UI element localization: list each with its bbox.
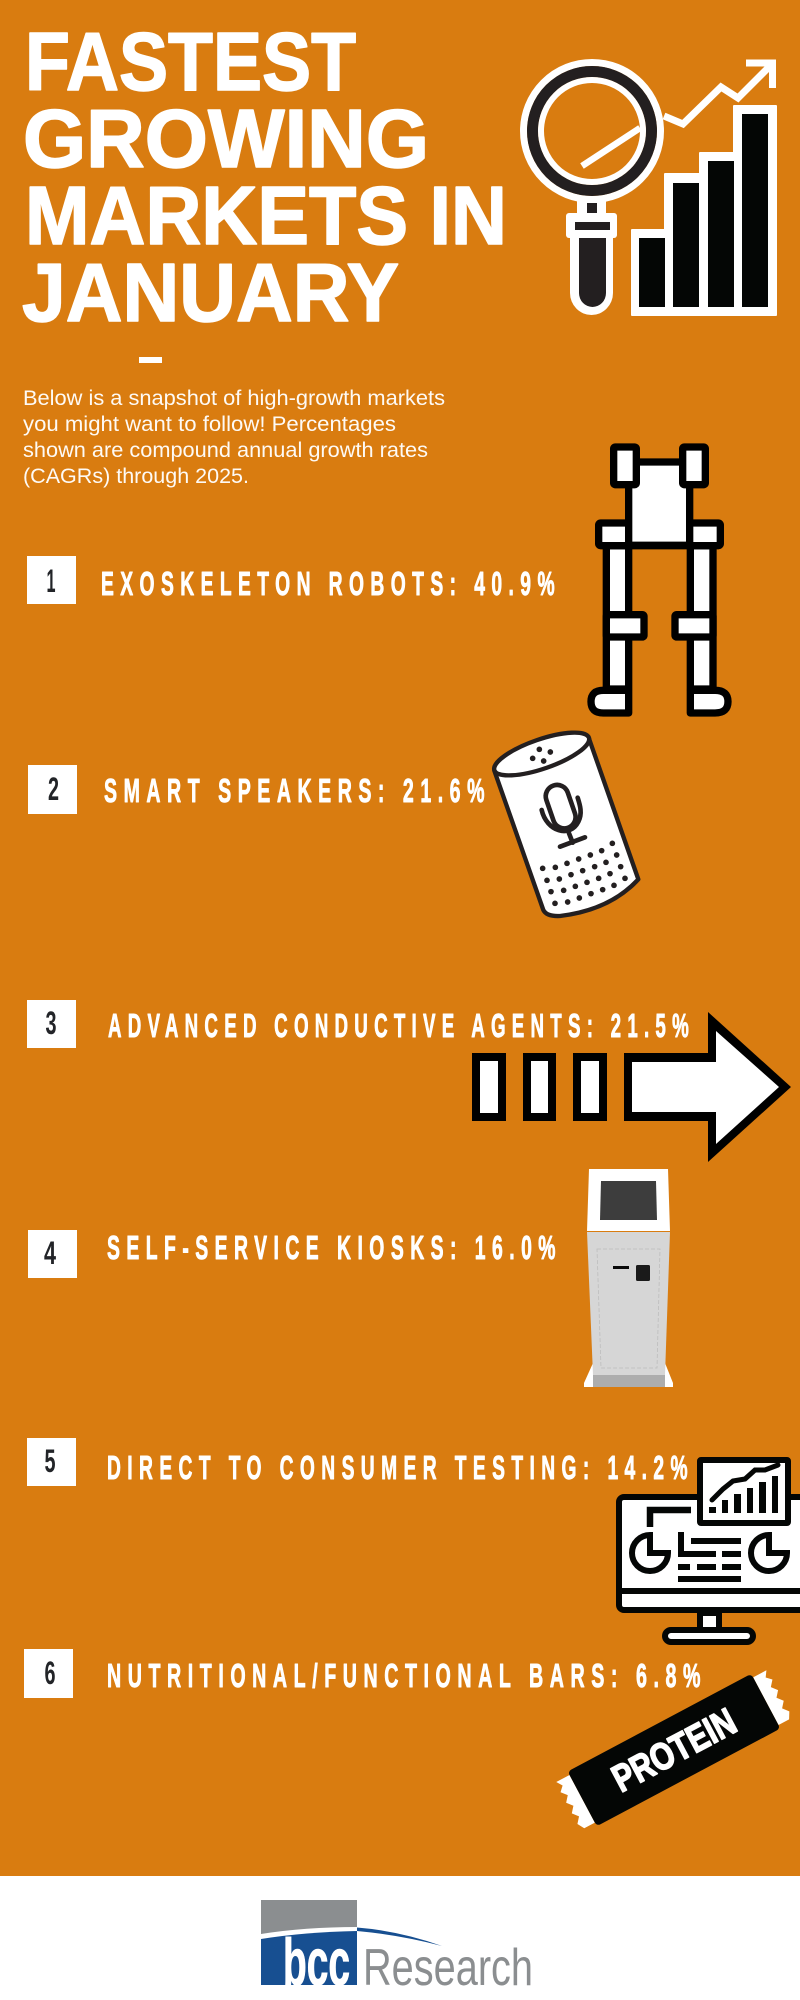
intro text: Below is a snapshot of high-growth markets bbox=[23, 387, 445, 410]
title: FASTEST bbox=[25, 15, 356, 108]
item 2 number bbox=[28, 765, 77, 814]
intro text: (CAGRs) through 2025. bbox=[23, 465, 249, 488]
intro text bbox=[23, 387, 445, 488]
icon: dashboard monitor bbox=[616, 1460, 800, 1642]
footer band bbox=[0, 1876, 800, 2000]
growth arrow bbox=[664, 63, 772, 124]
item 5 number: 5 bbox=[44, 1443, 56, 1479]
icon: protein bar: PROTEIN bbox=[605, 1701, 743, 1801]
item 2 number: 2 bbox=[48, 771, 59, 807]
icon: self-service kiosk bbox=[584, 1169, 673, 1387]
icon: smart speaker bbox=[490, 724, 638, 916]
item 5 number bbox=[27, 1438, 76, 1486]
icon: exoskeleton robot bbox=[591, 447, 728, 713]
magnifier bbox=[524, 62, 660, 315]
icon: dashed arrow bbox=[476, 1012, 791, 1162]
logo: BCC Research: bcc bbox=[283, 1925, 350, 1999]
logo: BCC Research: Research bbox=[363, 1939, 533, 1997]
intro text: you might want to follow! Percentages bbox=[23, 413, 396, 436]
item 1 number bbox=[27, 556, 76, 604]
item 1 number: 1 bbox=[46, 563, 56, 599]
growth chart bars bbox=[632, 106, 776, 315]
item 3 number: 3 bbox=[46, 1005, 56, 1041]
item 2 label: SMART SPEAKERS: 21.6% bbox=[104, 772, 491, 809]
title: GROWING bbox=[23, 92, 429, 185]
logo: BCC Research bbox=[261, 1900, 533, 1999]
title: JANUARY bbox=[22, 246, 399, 339]
item 3 number bbox=[27, 1000, 76, 1048]
item 6 number: 6 bbox=[44, 1655, 56, 1691]
title bbox=[22, 15, 507, 339]
title: MARKETS IN bbox=[25, 169, 507, 262]
item 4 number bbox=[28, 1230, 77, 1278]
icon: protein bar bbox=[553, 1666, 795, 1834]
icon: magnifier and growth chart bbox=[524, 62, 776, 315]
item 4 number: 4 bbox=[44, 1235, 56, 1271]
intro text: shown are compound annual growth rates bbox=[23, 439, 428, 462]
item 6 number bbox=[24, 1649, 73, 1698]
accent dash bbox=[139, 357, 162, 363]
